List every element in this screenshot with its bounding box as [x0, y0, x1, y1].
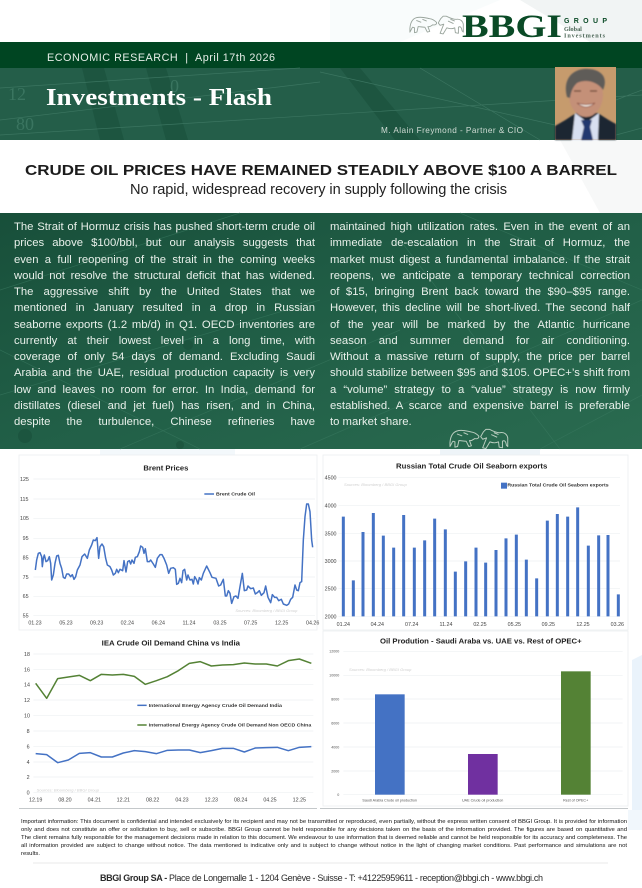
panel: Brent Prices chart: 09.23 [90, 621, 103, 627]
panel: IEA demand China vs India chart: 12.23 [205, 797, 218, 803]
panel: IEA demand China vs India chart [19, 631, 317, 809]
panel: Russian seaborne exports chart: 2500 [325, 587, 337, 593]
disclaimer: results. [21, 851, 40, 857]
panel: IEA demand China vs India chart: 04.23 [175, 797, 189, 803]
logo: BBGI Group: Investments [564, 32, 606, 40]
panel: IEA demand China vs India chart: 08.22 [146, 797, 159, 803]
body panel background [0, 213, 642, 449]
panel: Brent Prices chart: 75 [23, 575, 29, 581]
body text: left column: seaborne exports (1.2 mb/d) in Q1. OECD inventories are [14, 318, 315, 330]
header textured band: 0 [170, 76, 179, 96]
panel: IEA demand China vs India chart: 4 [27, 760, 30, 766]
body text: right column [330, 221, 630, 428]
publication title: Investments - Flash: Investments - Flash [46, 85, 272, 111]
panel: Oil production chart: 6000 [331, 721, 339, 725]
panel: Brent Prices chart: 11.24 [183, 621, 195, 627]
panel: IEA demand China vs India chart: 6 [27, 744, 30, 750]
panel: Russian seaborne exports chart: 12.25 [576, 622, 590, 628]
faint background shapes [100, 0, 642, 830]
panel: Brent Prices chart: 65 [23, 594, 29, 600]
panel: Brent Prices chart: 07.25 [244, 621, 257, 627]
header textured band [0, 68, 642, 140]
panel: Brent Prices chart: Brent Prices [143, 466, 188, 473]
panel: Oil production chart: 4000 [331, 745, 339, 749]
disclaimer [21, 819, 627, 857]
body text: left column: Arabia and the UAE, residual production capacity is very [14, 367, 315, 379]
panel: Oil production chart: 0 [337, 793, 339, 797]
panel: IEA demand China vs India chart: 8 [27, 729, 30, 735]
panel: IEA demand China vs India chart: International Energy Agency Crude Oil Demand India [149, 703, 282, 708]
panel: Oil production chart: 10000 [329, 674, 339, 678]
body text: right column: reopens, we anticipate a temporary technical correction [330, 270, 630, 282]
panel: Brent Prices chart: 55 [23, 614, 29, 620]
body text: left column: coverage of only 54 days of demand. Excluding Saudi [14, 351, 315, 363]
body text: left column: The Strait of Hormuz crisis has pushed short-term crude oil [14, 221, 315, 233]
panel: IEA demand China vs India chart: 0 [27, 791, 30, 797]
panel: IEA demand China vs India chart: International Energy Agency Crude Oil Demand Non OECD China [149, 723, 312, 728]
panel: IEA demand China vs India chart: 10 [24, 713, 30, 719]
panel: Russian seaborne exports chart: 09.25 [542, 622, 555, 628]
panel: IEA demand China vs India chart: Sources: Bloomberg / BBGI Group [37, 787, 100, 792]
panel: Oil production chart: Sources: Bloomberg / BBGI Group [349, 667, 412, 672]
body text: right column: Without a massive return of supply, the price per barrel [330, 351, 630, 363]
panel: IEA demand China vs India chart: 16 [24, 667, 30, 673]
panel: Russian seaborne exports chart: Russian Total Crude Oil Seaborn exports [507, 483, 609, 488]
panel: Oil production chart: 12000 [329, 650, 339, 654]
body text: right column: market must digest a fundamental imbalance. If the strait [330, 254, 630, 266]
panel: Oil production chart: Oil Prodution - Saudi Araba vs. UAE vs. Rest of OPEC+ [380, 638, 582, 645]
body text: left column: would not resolve the structural deficit that has widened. [14, 270, 315, 282]
panel: IEA demand China vs India chart: 04.21 [88, 797, 101, 803]
panel: Russian seaborne exports chart: 2000 [325, 614, 337, 620]
panel: Russian seaborne exports chart: 02.25 [473, 622, 487, 628]
body text: right column: to market share. [330, 416, 412, 428]
logo: BBGI Group [410, 9, 607, 45]
logo: BBGI Group: Global [564, 26, 582, 33]
body text: left column [14, 221, 315, 428]
header textured band: 80 [16, 114, 34, 134]
panel: Brent Prices chart: 85 [23, 555, 29, 561]
body text: right column: immediate de-escalation in the Strait of Hormuz, the [330, 237, 630, 249]
body text: left column: The aggressive shift by the United States that we [14, 286, 315, 298]
panel: Russian seaborne exports chart: Sources: Bloomberg / BBGI Group [344, 482, 407, 487]
panel: IEA demand China vs India chart: 12 [24, 698, 30, 704]
body text: right column: a “volume” strategy to a “value” strategy is now firmly [330, 384, 630, 396]
panel: Russian seaborne exports chart: 11.24 [440, 622, 452, 628]
author portrait [555, 67, 616, 140]
body text: right column: season and summer demand for air conditioning. [330, 335, 630, 347]
panel: IEA demand China vs India chart: 04.25 [263, 797, 277, 803]
panel: Russian seaborne exports chart: 04.24 [371, 622, 384, 628]
panel: Oil production chart [320, 631, 628, 808]
header label: economic research and date: ECONOMIC RESEARCH | April 17th 2026 [47, 52, 275, 64]
panel: Russian seaborne exports chart: Russian Total Crude Oil Seaborn exports [396, 464, 547, 471]
panel: IEA demand China vs India chart: 12.19 [29, 797, 42, 803]
panel: Oil production chart: Rest of OPEC+ [563, 799, 588, 803]
panel: IEA demand China vs India chart: 2 [27, 775, 30, 781]
panel: Oil production chart: 2000 [331, 769, 339, 773]
header dark bar [0, 42, 642, 68]
logo: BBGI Group: GROUP [564, 18, 607, 25]
panel: Russian seaborne exports chart: 01.24 [337, 622, 350, 628]
panel: Brent Prices chart: 12.25 [275, 621, 288, 627]
header textured band: 12 [8, 84, 26, 104]
panel: Brent Prices chart: 95 [23, 536, 29, 542]
headline: CRUDE OIL PRICES HAVE REMAINED STEADILY ABOVE $100 A BARREL [25, 162, 617, 179]
panel: IEA demand China vs India chart: 18 [24, 652, 30, 658]
author caption: M. Alain Freymond - Partner & CIO [381, 126, 523, 135]
body text: right column: of $15, bringing Brent back toward the $90–$95 range. [330, 286, 630, 298]
body text: left column: despite the turbulence, Chinese refineries have [14, 416, 315, 428]
body text: left column: low and leaves no room for error. In India, demand for [14, 384, 315, 396]
panel: Brent Prices chart: 115 [20, 497, 29, 503]
panel: Russian seaborne exports chart: 4000 [325, 503, 337, 509]
panel: Brent Prices chart: 06.24 [152, 621, 165, 627]
panel: Brent Prices chart: 01.23 [28, 621, 42, 627]
panel: IEA demand China vs India chart: 08.24 [234, 797, 247, 803]
panel: Russian seaborne exports chart: 4500 [325, 475, 337, 481]
panel: IEA demand China vs India chart: 08.20 [58, 797, 72, 803]
body text: right column: of the year will be marked by the Atlantic hurricane [330, 318, 630, 330]
panel: Brent Prices chart: 03.25 [213, 621, 227, 627]
body text: left column: mentioned in January resulted in a drop in Russian [14, 302, 315, 314]
panel: Russian seaborne exports chart: 3000 [325, 559, 337, 565]
panel: Oil production chart: 8000 [331, 697, 339, 701]
panel: Brent Prices chart: 105 [20, 516, 29, 522]
panel: Oil production chart: Saudi Arabia Crude oil production [362, 799, 417, 803]
subheading: No rapid, widespread recovery in supply following the crisis [130, 182, 507, 198]
panel: IEA demand China vs India chart: 12.25 [293, 797, 306, 803]
panel: Brent Prices chart: Sources: Bloomberg / BBGI Group [235, 608, 298, 613]
panel: Russian seaborne exports chart: 05.25 [508, 622, 521, 628]
panel: Brent Prices chart: 02.24 [121, 621, 134, 627]
panel: Russian seaborne exports chart [323, 455, 628, 630]
body text: right column: However, this decline will be short-lived. The second half [330, 302, 630, 314]
body text: right column: maintained high utilization rates. Even in the event of an [330, 221, 630, 233]
panel: Brent Prices chart [19, 455, 319, 630]
body text: left column: distillates (diesel and jet fuel) has risen, and in China, [14, 400, 315, 412]
body text: left column: currently at their lowest level in a long time, with [14, 335, 315, 347]
body text: right column: established. A scarce and expensive barrel is preferable [330, 400, 630, 412]
body text: left column: even a full reopening of the strait in the coming weeks [14, 254, 315, 266]
panel: IEA demand China vs India chart: 12.21 [117, 797, 130, 803]
panel: Russian seaborne exports chart: 3500 [325, 531, 337, 537]
footer contact line: BBGI Group SA - Place de Longemalle 1 - 1204 Genève - Suisse - T: +41225959611 - reception@bbgi.ch - www.bbgi.ch [100, 873, 543, 883]
panel: Brent Prices chart: 125 [20, 477, 29, 483]
panel: IEA demand China vs India chart: IEA Crude Oil Demand China vs India [102, 641, 240, 648]
body text: left column: prices above $100/bbl, but our analysis suggests that [14, 237, 315, 249]
panel: Russian seaborne exports chart: 07.24 [405, 622, 418, 628]
logo: BBGI Group: BBGI [462, 9, 562, 45]
panel: Oil production chart: UAE Crude oil production [462, 799, 503, 803]
panel: Brent Prices chart: 05.23 [59, 621, 73, 627]
panel: Russian seaborne exports chart: 03.26 [611, 622, 624, 628]
panel: Brent Prices chart: Brent Crude Oil [216, 492, 255, 497]
panel: Brent Prices chart: 04.26 [306, 621, 319, 627]
panel: IEA demand China vs India chart: 14 [24, 683, 30, 689]
body text: right column: should stabilize between $95 and $105. OPEC+’s shift from [330, 367, 630, 379]
